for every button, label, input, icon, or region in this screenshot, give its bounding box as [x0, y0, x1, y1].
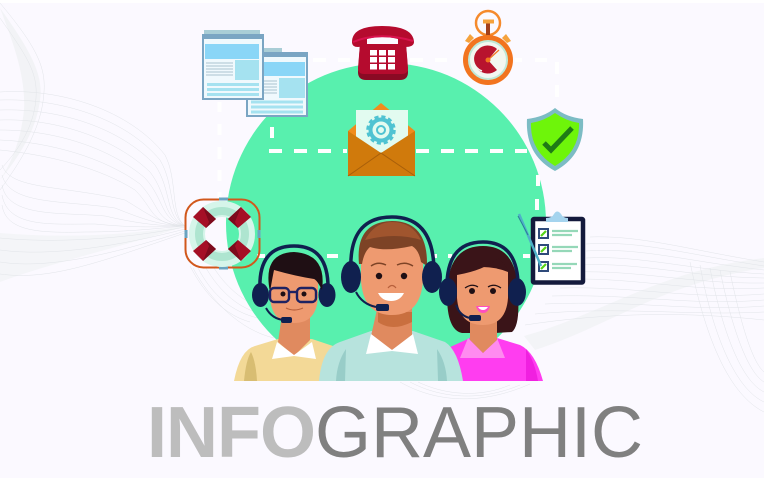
green background circle: [226, 64, 546, 347]
person: center man: [319, 217, 463, 381]
top: [448, 338, 543, 381]
icon: checklist clipboard: [518, 212, 583, 282]
icon: web pages: [203, 30, 307, 116]
headset: [252, 246, 336, 323]
dashed connector lines: [220, 60, 557, 256]
neck: [278, 315, 310, 356]
nose: [388, 286, 396, 288]
background wave right: [400, 237, 764, 412]
face: [457, 267, 508, 325]
icon: life buoy: [186, 199, 260, 268]
collar: [272, 342, 316, 359]
mouth: [286, 308, 303, 310]
smile: [378, 293, 404, 301]
neck: [470, 318, 497, 353]
face: [361, 245, 423, 315]
hair front: [450, 247, 515, 285]
neck: [371, 305, 412, 350]
icon: red telephone: [352, 26, 414, 80]
icon: stopwatch: [463, 11, 513, 85]
eyes: [376, 273, 382, 279]
eyes: [280, 292, 286, 296]
lips: [476, 306, 490, 313]
person: left man with glasses: [234, 246, 336, 381]
title: [147, 393, 643, 473]
background wave left: [0, 3, 274, 338]
eyes: [469, 288, 475, 294]
collar: [460, 338, 505, 358]
glasses: [270, 288, 316, 302]
hair back: [447, 246, 518, 333]
sweater: [319, 331, 463, 381]
headset: [341, 217, 442, 311]
collar: [366, 334, 418, 354]
headset: [439, 242, 526, 321]
title word: GRAPHIC: GRAPHIC: [315, 393, 643, 473]
hair: [268, 252, 323, 292]
gear: [368, 117, 394, 143]
front page: [203, 30, 263, 99]
icon: shield with check: [527, 108, 583, 171]
person: woman: [439, 242, 543, 381]
sweater: [234, 339, 333, 381]
icon: envelope with gear: [348, 103, 415, 176]
title word: INFO: INFO: [147, 393, 315, 473]
back page: [247, 48, 307, 116]
face: [269, 268, 318, 323]
hair: [359, 221, 427, 266]
